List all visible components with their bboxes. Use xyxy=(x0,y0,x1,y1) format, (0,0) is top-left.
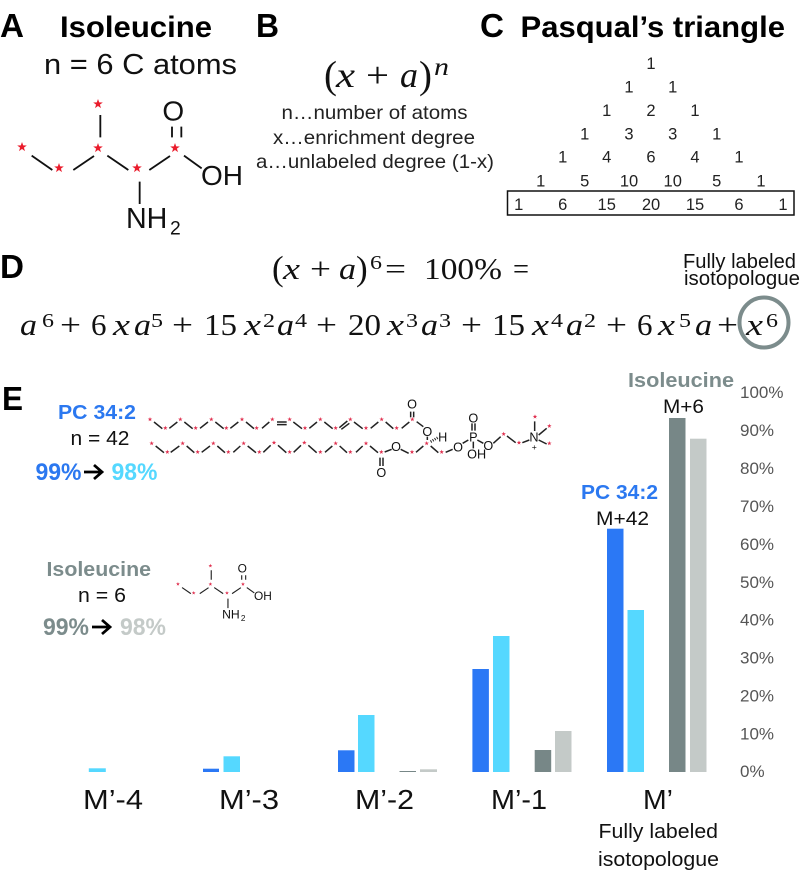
panel A: isoleucine xyxy=(0,7,243,239)
triangle numbers: 2 xyxy=(646,102,656,120)
bars: PC 34:2 at 98% xyxy=(89,610,644,772)
enrichment 99% to 98%: 98% xyxy=(112,459,158,486)
expanded polynomial: + xyxy=(172,307,193,342)
definitions of n, x and a: a…unlabeled degree (1-x) xyxy=(256,151,494,173)
y axis labels: 60% xyxy=(740,535,774,554)
bar label: PC 34:2 M+42 xyxy=(581,482,658,530)
expanded polynomial xyxy=(20,307,778,342)
formula (x+a)^n: x xyxy=(335,55,355,95)
panel letter D: D xyxy=(0,248,24,285)
expanded polynomial: a xyxy=(695,307,712,342)
triangle numbers: 1 xyxy=(558,148,567,166)
bars: isoleucine at 98% xyxy=(420,439,706,772)
enrichment 99% to 98%: 99% xyxy=(36,459,82,486)
y axis labels: 0% xyxy=(740,762,765,781)
expanded polynomial: 20 xyxy=(348,307,381,342)
x axis labels: M’-2 xyxy=(355,784,414,815)
callout: fully labeled isotopologue: Fully labeled xyxy=(683,251,796,273)
structure: PC 34:2: O xyxy=(468,412,478,426)
y axis labels: 40% xyxy=(740,610,774,630)
expanded polynomial: a xyxy=(134,307,151,342)
expanded polynomial: 6 xyxy=(637,307,652,342)
structure: PC 34:2: O xyxy=(422,425,432,439)
structure: PC 34:2: OH xyxy=(467,448,486,462)
formula: (x+a)^6 = 100%: = xyxy=(385,251,406,286)
structure: isoleucine small: NH xyxy=(222,607,240,621)
bars: isoleucine at 99% xyxy=(400,418,686,772)
bar label: Isoleucine M+6 xyxy=(628,370,734,418)
formula: (x+a)^6 = 100% xyxy=(272,249,529,288)
labeled carbons in isoleucine xyxy=(17,99,180,172)
expanded polynomial: + xyxy=(461,307,482,342)
expanded polynomial: x xyxy=(745,307,763,342)
panel C: Pascal's triangle xyxy=(480,7,794,215)
expanded polynomial: x xyxy=(531,307,549,342)
structure: PC 34:2: N xyxy=(529,431,539,445)
panel letter B: B xyxy=(256,7,279,44)
box around bottom row xyxy=(508,191,794,215)
panel letter A: A xyxy=(0,7,24,44)
PC 34:2 name: PC 34:2 xyxy=(58,402,136,424)
formula (x+a)^n xyxy=(324,54,449,97)
bar chart xyxy=(83,370,783,871)
expanded polynomial: 6 xyxy=(42,310,54,332)
structure: PC 34:2: O xyxy=(483,439,493,453)
structure: isoleucine large: 2 xyxy=(170,218,181,239)
structure: PC 34:2: + xyxy=(532,442,537,452)
expanded polynomial: + xyxy=(60,307,81,342)
y axis labels: 90% xyxy=(740,421,774,440)
x axis labels: M’-1 xyxy=(491,784,547,815)
caption: fully labeled isotopologue: isotopologue xyxy=(598,849,719,871)
n = 42: n = 42 xyxy=(70,428,130,450)
x axis labels: M’-3 xyxy=(219,784,279,815)
structure: PC 34:2: P xyxy=(469,430,478,444)
structure: PC 34:2: O xyxy=(407,398,417,412)
heading: Isoleucine: Isoleucine xyxy=(60,11,212,44)
triangle numbers: 1 xyxy=(580,126,589,144)
panel B: binomial formula xyxy=(256,7,494,173)
heading: Pasqual's triangle: Pasqual’s triangle xyxy=(520,11,785,44)
enrichment 99% to 98% xyxy=(43,614,166,641)
triangle numbers: 4 xyxy=(602,148,611,166)
expanded polynomial: 15 xyxy=(204,307,237,342)
panel D: expansion xyxy=(0,248,800,348)
y axis labels: 100% xyxy=(740,383,783,402)
triangle numbers: 10 xyxy=(664,172,682,190)
triangle numbers: 1 xyxy=(756,172,766,190)
expanded polynomial: a xyxy=(277,307,294,342)
x axis labels xyxy=(83,784,673,815)
enrichment 99% to 98%: 99% xyxy=(43,614,89,641)
structure: PC 34:2: O xyxy=(376,466,386,480)
triangle numbers: 3 xyxy=(624,126,634,144)
expanded polynomial: 6 xyxy=(766,310,778,332)
triangle numbers: 6 xyxy=(646,148,656,166)
definitions of n, x and a: x…enrichment degree xyxy=(273,127,475,149)
expanded polynomial: a xyxy=(20,307,37,342)
expanded polynomial: x xyxy=(243,307,261,342)
legend: isoleucine xyxy=(43,559,166,641)
formula (x+a)^n: ) xyxy=(419,54,432,97)
formula (x+a)^n: a xyxy=(400,55,418,95)
triangle numbers: 10 xyxy=(620,172,638,190)
x axis labels: M’-4 xyxy=(83,784,143,815)
expanded polynomial: + xyxy=(717,307,738,342)
triangle numbers: 15 xyxy=(598,196,616,214)
triangle numbers: 4 xyxy=(690,148,700,166)
structure: isoleucine large: OH xyxy=(201,160,243,191)
y axis labels: 50% xyxy=(740,573,774,592)
panel E: letter: E xyxy=(2,380,23,417)
expanded polynomial: 4 xyxy=(295,310,307,332)
callout: fully labeled isotopologue xyxy=(683,251,800,290)
triangle numbers: 1 xyxy=(668,78,677,96)
y axis labels: 30% xyxy=(740,648,774,668)
triangle numbers: 1 xyxy=(690,102,700,120)
bar label: PC 34:2 M+42: M+42 xyxy=(596,509,649,530)
expanded polynomial: 4 xyxy=(551,310,563,332)
n = 6: n = 6 xyxy=(78,585,126,607)
legend: PC 34:2 xyxy=(36,402,158,486)
structure: isoleucine small xyxy=(176,562,272,623)
structure: isoleucine large: NH xyxy=(126,203,167,235)
expanded polynomial: 2 xyxy=(263,310,275,332)
formula (x+a)^n: ( xyxy=(324,54,337,97)
triangle numbers: 1 xyxy=(514,196,523,214)
bar label: PC 34:2 M+42: PC 34:2 xyxy=(581,482,658,504)
bar label: Isoleucine M+6: Isoleucine xyxy=(628,370,734,392)
bars: PC 34:2 at 99% xyxy=(203,529,624,772)
n = 6 C atoms: n = 6 C atoms xyxy=(44,49,237,81)
definitions of n, x and a: n…number of atoms xyxy=(282,102,468,124)
expanded polynomial: 6 xyxy=(91,307,106,342)
y axis labels: 80% xyxy=(740,459,774,478)
expanded polynomial: 5 xyxy=(151,310,163,332)
formula: (x+a)^6 = 100%: ) xyxy=(356,249,368,288)
triangle numbers xyxy=(514,55,788,214)
expanded polynomial: a xyxy=(566,307,583,342)
triangle numbers: 1 xyxy=(536,172,545,190)
structure: isoleucine large: O xyxy=(162,96,184,127)
y axis labels xyxy=(740,383,783,781)
enrichment 99% to 98% xyxy=(36,459,158,486)
formula: (x+a)^6 = 100%: + xyxy=(310,251,331,286)
x axis labels: M’ xyxy=(643,784,673,815)
triangle numbers: 1 xyxy=(602,102,611,120)
y axis labels: 70% xyxy=(740,497,774,516)
formula: (x+a)^6 = 100%: x xyxy=(282,251,300,286)
triangle numbers: 1 xyxy=(646,55,656,73)
formula: (x+a)^6 = 100%: = xyxy=(513,251,529,286)
expanded polynomial: 15 xyxy=(492,307,525,342)
expanded polynomial: + xyxy=(316,307,337,342)
expanded polynomial: 2 xyxy=(584,310,596,332)
structure: PC 34:2: O xyxy=(453,440,463,454)
triangle numbers: 6 xyxy=(734,196,744,214)
structure: PC 34:2 xyxy=(148,398,552,480)
expanded polynomial: 5 xyxy=(679,310,691,332)
formula: (x+a)^6 = 100%: 100% xyxy=(424,251,502,286)
expanded polynomial: 3 xyxy=(406,310,418,332)
triangle numbers: 1 xyxy=(712,126,721,144)
triangle numbers: 20 xyxy=(642,196,660,214)
formula: (x+a)^6 = 100%: 6 xyxy=(370,252,382,274)
structure: isoleucine small: OH xyxy=(254,589,272,603)
triangle numbers: 1 xyxy=(734,148,744,166)
triangle numbers: 15 xyxy=(686,196,704,214)
caption: fully labeled isotopologue xyxy=(598,821,719,871)
structure: isoleucine small: O xyxy=(238,562,247,576)
panel letter C: C xyxy=(480,7,504,44)
formula: (x+a)^6 = 100%: ( xyxy=(272,249,284,288)
caption: fully labeled isotopologue: Fully labeled xyxy=(598,821,718,843)
expanded polynomial: x xyxy=(386,307,404,342)
expanded polynomial: + xyxy=(606,307,627,342)
formula (x+a)^n: + xyxy=(366,55,389,95)
expanded polynomial: x xyxy=(112,307,130,342)
formula: (x+a)^6 = 100%: a xyxy=(339,251,356,286)
expanded polynomial: x xyxy=(657,307,675,342)
expanded polynomial: a xyxy=(421,307,438,342)
y axis labels: 20% xyxy=(740,686,774,706)
Isoleucine name: Isoleucine xyxy=(46,559,151,581)
y axis labels: 10% xyxy=(740,724,774,744)
formula (x+a)^n: n xyxy=(434,54,449,81)
structure: PC 34:2: O xyxy=(391,440,401,454)
enrichment 99% to 98%: 98% xyxy=(120,614,166,641)
structure: isoleucine small: 2 xyxy=(241,614,246,623)
callout: fully labeled isotopologue: isotopologue xyxy=(684,268,800,290)
expanded polynomial: 3 xyxy=(439,310,451,332)
circle around x^6 xyxy=(740,298,788,348)
bar label: Isoleucine M+6: M+6 xyxy=(663,397,704,418)
triangle numbers: 5 xyxy=(712,172,721,190)
triangle numbers: 1 xyxy=(624,78,634,96)
structure: PC 34:2: H xyxy=(438,431,447,445)
definitions of n, x and a xyxy=(256,102,494,173)
triangle numbers: 3 xyxy=(668,126,677,144)
triangle numbers: 5 xyxy=(580,172,589,190)
triangle numbers: 6 xyxy=(558,196,567,214)
structure: isoleucine large xyxy=(32,96,243,239)
triangle numbers: 1 xyxy=(778,196,788,214)
